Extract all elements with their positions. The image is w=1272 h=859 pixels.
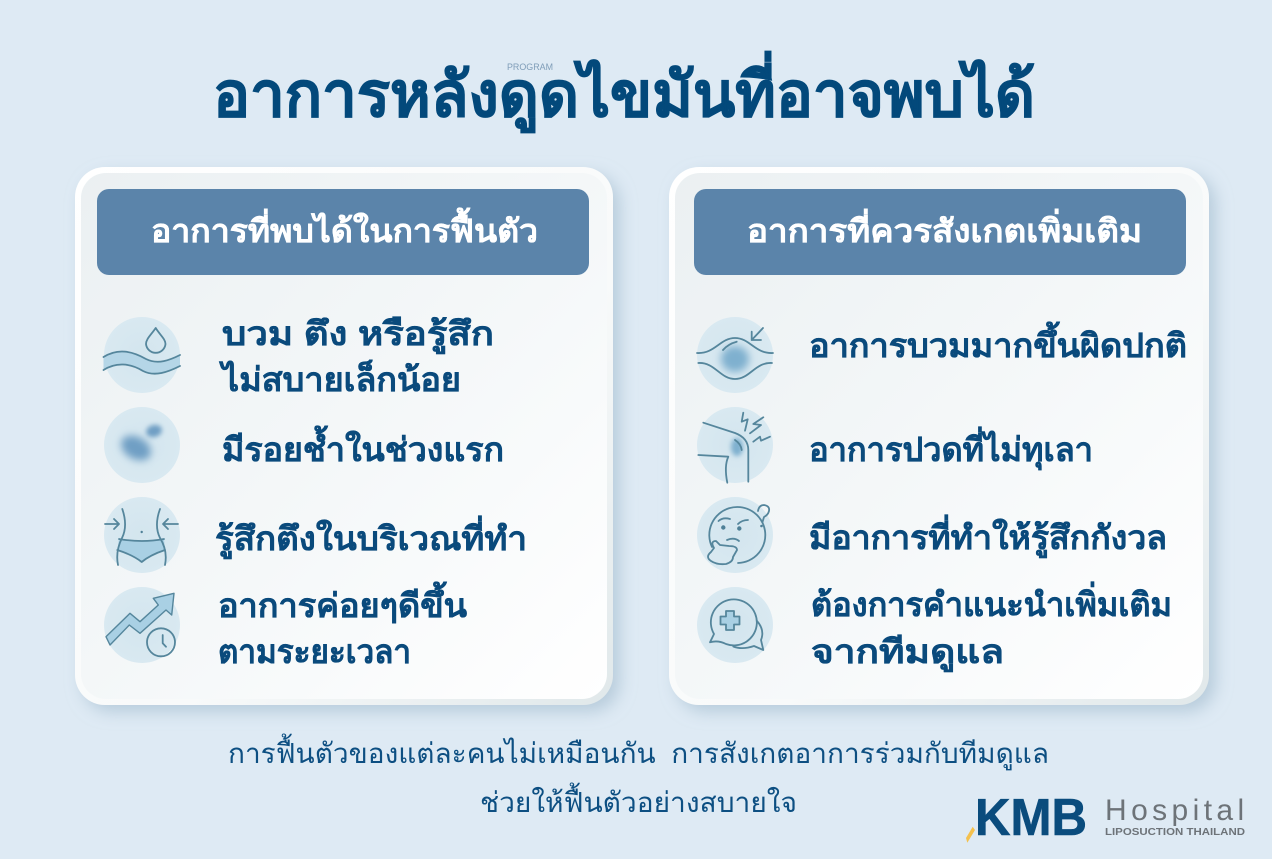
logo: KMB Hospital <box>966 789 1249 847</box>
icon: knee pain <box>697 407 773 483</box>
text: gradually improves: อาการค่อยๆดีขึ้น <box>218 581 467 624</box>
text: swelling more than normal: อาการบวมมากขึ้นผิดปกติ <box>809 321 1187 364</box>
icon: bruise <box>104 407 180 483</box>
text: tightness in treated area: รู้สึกตึงในบริเวณที่ทำ <box>215 515 527 560</box>
title: อาการหลังดูดไขมันที่อาจพบได้ <box>213 51 1035 133</box>
text: worrying symptoms: มีอาการที่ทำให้รู้สึกกังวล <box>809 514 1167 559</box>
icon: thinking face <box>697 497 773 573</box>
heading: symptoms to watch: อาการที่ควรสังเกตเพิ่มเติม <box>747 208 1142 249</box>
logo: KMB Hospital: Hospital <box>1105 794 1249 827</box>
text: early bruising: มีรอยช้ำในช่วงแรก <box>222 425 504 468</box>
icon: improving trend and clock <box>104 587 180 663</box>
text: swelling: บวม ตึง หรือรู้สึก <box>222 315 494 355</box>
text: from care team: จากทีมดูแล <box>811 633 1004 673</box>
heading: recovery symptoms: อาการที่พบได้ในการฟื้นตัว <box>151 207 538 249</box>
icon: abnormal swelling <box>697 317 773 393</box>
footer note line 1: การฟื้นตัวของแต่ละคนไม่เหมือนกัน การสังเกตอาการร่วมกับทีมดูแล <box>228 733 1049 771</box>
heading: recovery symptoms <box>97 189 589 275</box>
text: slight discomfort: ไม่สบายเล็กน้อย <box>219 359 461 398</box>
icon: waist tightness <box>104 497 180 573</box>
logo: KMB Hospital: LIPOSUCTION THAILAND <box>1105 826 1245 838</box>
icon: medical advice chat <box>697 587 773 663</box>
heading: symptoms to watch <box>694 189 1186 275</box>
icon: swelling wave and drop <box>104 317 180 393</box>
text: need more advice: ต้องการคำแนะนำเพิ่มเติม <box>811 581 1172 623</box>
footer note line 2: ช่วยให้ฟื้นตัวอย่างสบายใจ <box>480 782 797 818</box>
panel: symptoms to watch <box>669 167 1209 705</box>
text: persistent pain: อาการปวดที่ไม่ทุเลา <box>809 426 1093 471</box>
small program label: PROGRAM <box>507 62 553 72</box>
logo: KMB Hospital: KMB <box>975 789 1087 847</box>
text: over time: ตามระยะเวลา <box>218 633 411 670</box>
panel: recovery symptoms <box>75 167 613 705</box>
